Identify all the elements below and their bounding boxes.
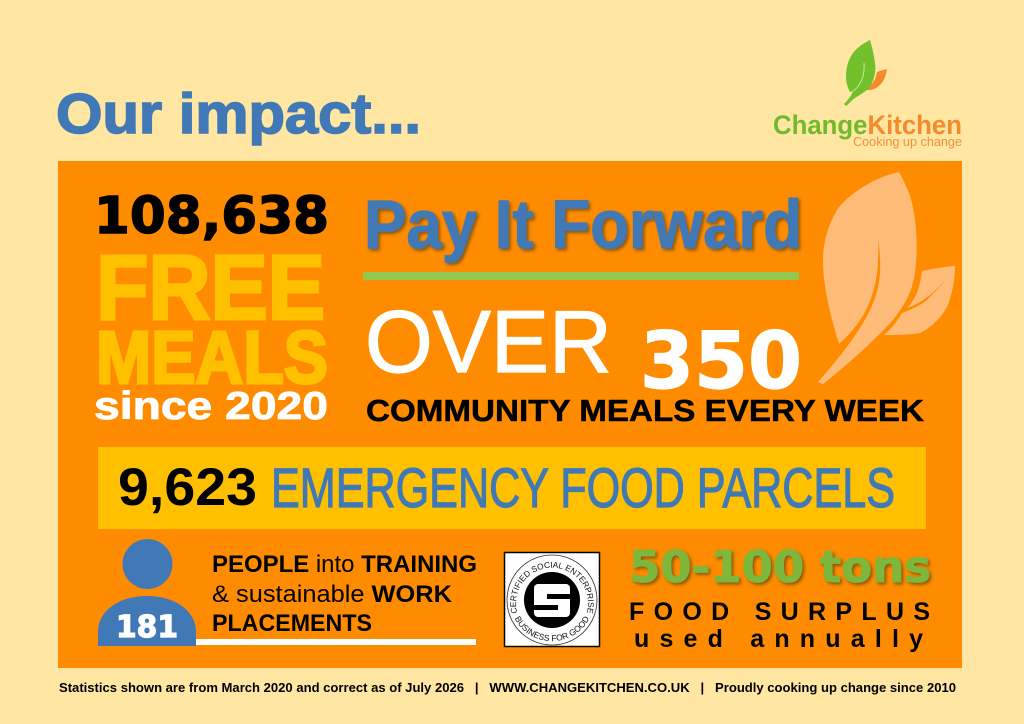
text: community meals every week: COMMUNITY MEALS EVERY WEEK (366, 393, 925, 428)
stat: 350: 350 (640, 317, 802, 407)
icon: large pale leaf (818, 172, 955, 384)
icon: logo leaf vein (853, 63, 864, 91)
stat: 108,638: 108,638 (94, 187, 329, 246)
badge text bottom: BUSINESS FOR GOOD (514, 616, 588, 642)
logo wordmark: ChangeKitchen (773, 110, 962, 140)
panel: emergency food parcels banner (98, 447, 926, 529)
icon: orange logo leaf (866, 69, 887, 90)
text: since 2020: since 2020 (94, 385, 328, 428)
heading: FREE: FREE (96, 237, 325, 339)
text: people into training: & sustainable WORK (212, 581, 452, 608)
badge text top: CERTIFIED SOCIAL ENTERPRISE (510, 562, 594, 614)
heading: Pay It Forward: Pay It Forward (364, 186, 802, 263)
icon: green logo leaf (844, 40, 875, 106)
icon: person with 181 (98, 539, 196, 646)
heading: MEALS: MEALS (96, 316, 328, 399)
stat: 50-100 tons: 50-100 tons (629, 542, 931, 593)
stat: 181: 181 (116, 610, 178, 645)
text: people into training (212, 551, 477, 637)
divider: green bar (363, 272, 799, 280)
panel: orange impact panel (58, 161, 962, 668)
text: OVER: OVER (365, 292, 612, 391)
logo: Change Kitchen (773, 40, 962, 149)
footer: Statistics shown are from March 2020 and correct as of July 2026 | WWW.CHANGEKITCHEN.CO.UK | Proudly cooking up change since 2010 (59, 681, 956, 695)
stat: 9,623: 9,623 (118, 458, 257, 517)
text: people into training: PLACEMENTS (212, 610, 372, 637)
text: food surplus: FOOD SURPLUS (629, 598, 930, 626)
text: used annually: used annually (634, 625, 923, 653)
divider: white underline (196, 639, 476, 645)
text: people into training: PEOPLE into TRAINING (212, 551, 477, 578)
title: Our impact... (56, 82, 421, 146)
logo tagline: Cooking up change (853, 134, 962, 149)
badge: certified social enterprise (504, 552, 600, 648)
